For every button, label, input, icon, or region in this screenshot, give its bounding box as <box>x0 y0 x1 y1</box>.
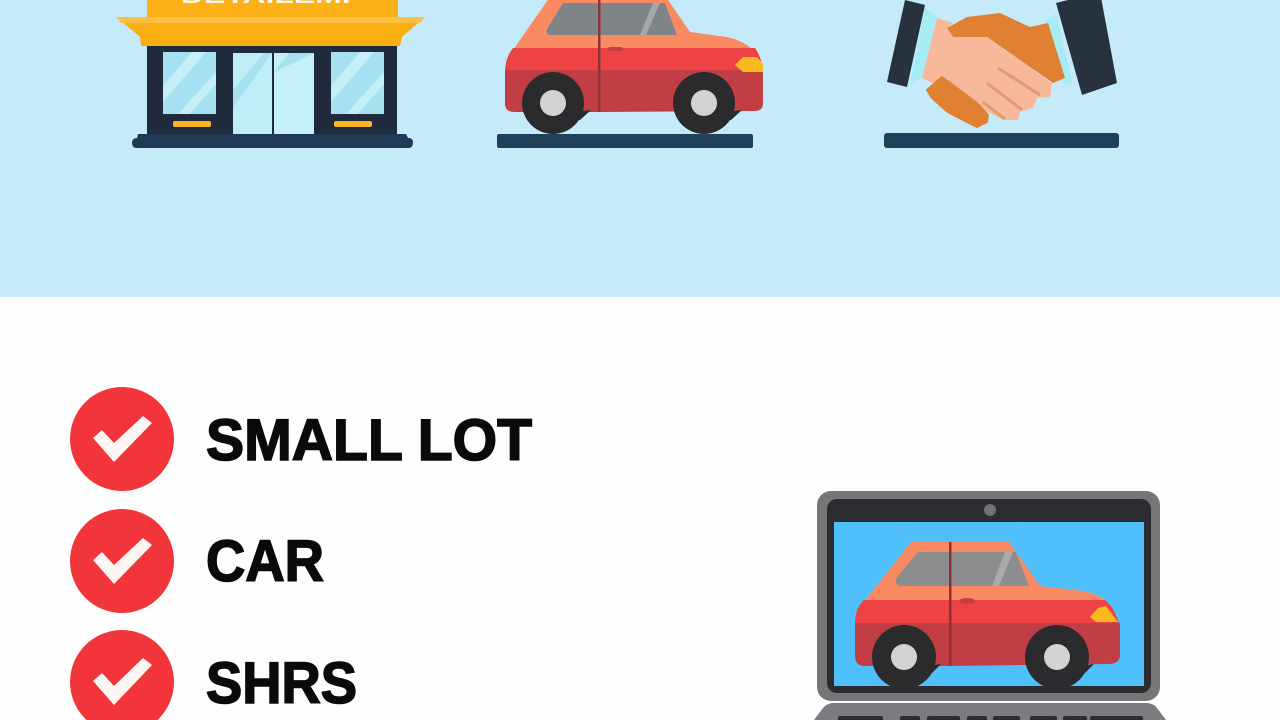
car headlight <box>735 57 763 72</box>
icon: dealership storefront <box>116 0 425 148</box>
label: small lot: SMALL LOT <box>206 408 532 473</box>
screen car <box>855 542 1120 689</box>
label: car: CAR <box>206 529 324 594</box>
laptop lid <box>817 491 1160 701</box>
car upper body <box>505 48 763 72</box>
pink hand <box>922 18 1052 120</box>
left shirt cuff <box>910 8 937 83</box>
check icon <box>70 387 174 491</box>
checklist item: small lot <box>70 387 532 491</box>
checklist item: car <box>70 509 324 613</box>
car door handle <box>608 47 623 51</box>
orange hand <box>947 13 1065 83</box>
check icon <box>70 509 174 613</box>
handshake ground bar <box>884 133 1119 148</box>
car lower body <box>505 70 763 112</box>
screen car roof <box>864 542 1105 602</box>
laptop camera <box>984 504 996 516</box>
car windows <box>546 3 677 35</box>
finger lines <box>983 68 1040 119</box>
label: shrs: SHRS <box>206 651 357 716</box>
screen car windows <box>896 552 1029 586</box>
screen car front wheel <box>1025 625 1094 689</box>
storefront base <box>132 134 413 148</box>
screen car lower body <box>855 623 1120 666</box>
left sleeve <box>887 0 925 87</box>
car roof <box>513 0 755 52</box>
glass doors <box>233 53 314 135</box>
checklist item: shrs <box>70 630 357 720</box>
screen car door handle <box>959 598 975 604</box>
icon: handshake <box>884 0 1119 148</box>
laptop base <box>814 703 1166 720</box>
icon: laptop with car on screen <box>814 491 1166 720</box>
laptop bezel <box>827 499 1151 693</box>
car door line <box>598 0 600 112</box>
car ground bar <box>497 134 753 148</box>
right shirt cuff <box>1046 14 1072 85</box>
screen car rear wheel <box>872 625 941 689</box>
panel: light blue top band <box>0 0 1280 297</box>
laptop keyboard <box>838 716 1143 720</box>
right sleeve <box>1056 0 1117 95</box>
storefront wall <box>147 46 397 136</box>
icon: red car <box>497 0 763 148</box>
checklist <box>70 387 532 720</box>
car rear wheel <box>522 72 591 134</box>
storefront sign <box>147 0 398 18</box>
right window <box>331 52 384 114</box>
left window <box>163 52 216 114</box>
storefront awning <box>116 17 425 46</box>
screen car upper body <box>855 600 1119 624</box>
check icon <box>70 630 174 720</box>
door handles <box>173 121 372 127</box>
car front wheel <box>673 72 742 134</box>
laptop screen <box>834 522 1144 686</box>
orange fingers <box>927 77 988 127</box>
screen car door line <box>949 542 952 666</box>
screen car headlight <box>1090 606 1118 622</box>
